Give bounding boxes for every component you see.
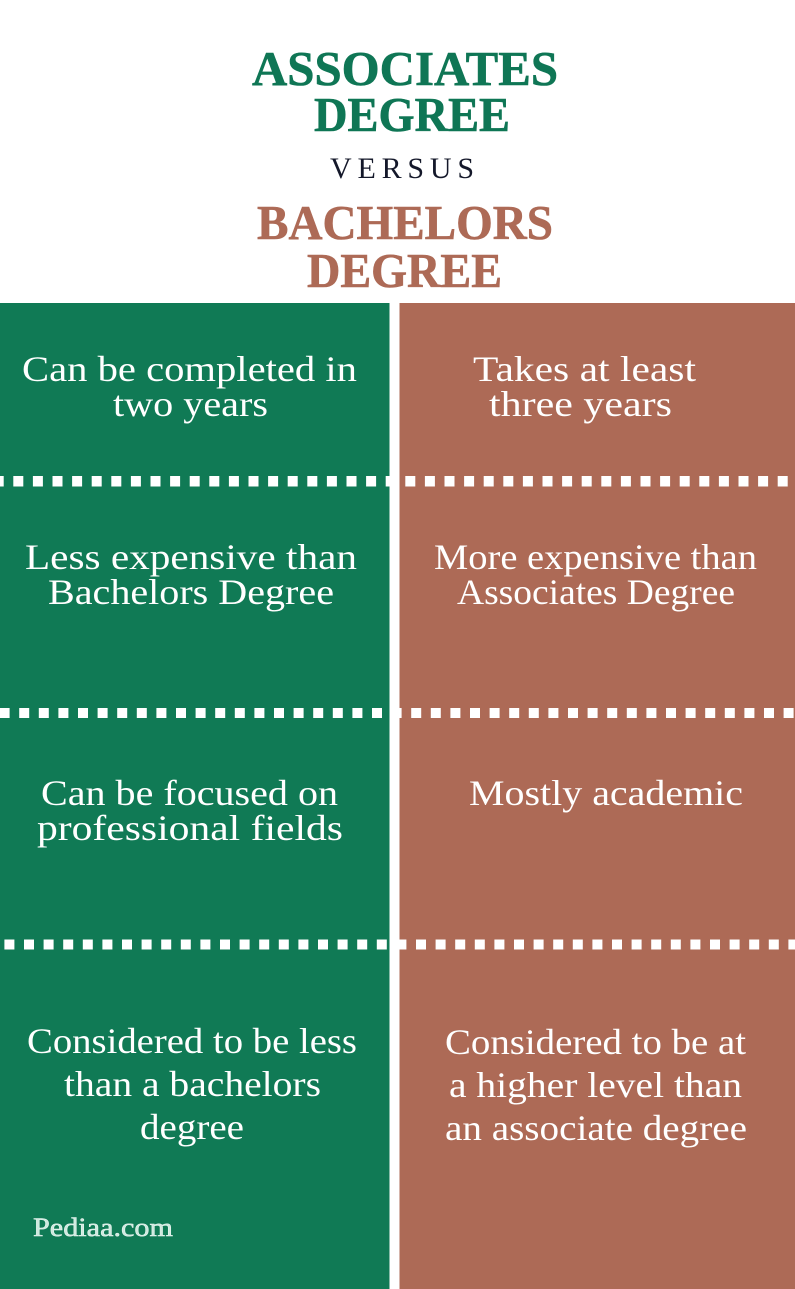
title: associates degree <box>252 41 558 142</box>
versus label: VERSUS <box>330 152 474 185</box>
text: bachelors cost <box>434 537 757 612</box>
text: associates level <box>27 1021 357 1147</box>
text: associates level: Considered to be less <box>27 1021 357 1061</box>
panel: associates column <box>0 303 390 1289</box>
text: bachelors level: a higher level than <box>449 1065 742 1105</box>
text: associates focus: Can be focused on <box>41 773 338 813</box>
text: associates duration <box>22 349 357 424</box>
text: bachelors cost: More expensive than <box>434 537 757 577</box>
text: associates duration: Can be completed in <box>22 349 357 389</box>
title: bachelors degree: BACHELORS <box>257 195 553 250</box>
logo: Pediaa.com: Pediaa.com <box>33 1213 173 1242</box>
text: associates cost <box>25 537 357 612</box>
title: associates degree: DEGREE <box>314 87 510 142</box>
text: bachelors duration: Takes at least <box>473 349 696 389</box>
text: bachelors focus: Mostly academic <box>469 773 743 813</box>
title: bachelors degree <box>257 195 553 298</box>
text: associates cost: Bachelors Degree <box>48 572 334 612</box>
text: bachelors duration: three years <box>489 384 672 424</box>
text: associates level: degree <box>140 1107 244 1147</box>
text: associates focus <box>37 773 343 848</box>
title: associates degree: ASSOCIATES <box>252 41 558 96</box>
text: associates duration: two years <box>113 384 268 424</box>
text: associates level: than a bachelors <box>64 1064 321 1104</box>
text: bachelors duration <box>473 349 696 424</box>
title: bachelors degree: DEGREE <box>307 243 502 298</box>
text: bachelors level: Considered to be at <box>445 1022 746 1062</box>
text: bachelors cost: Associates Degree <box>457 572 735 612</box>
text: bachelors level: an associate degree <box>445 1108 747 1148</box>
panel: bachelors column <box>400 303 795 1289</box>
text: bachelors level <box>445 1022 747 1148</box>
text: associates focus: professional fields <box>37 808 343 848</box>
text: associates cost: Less expensive than <box>25 537 357 577</box>
